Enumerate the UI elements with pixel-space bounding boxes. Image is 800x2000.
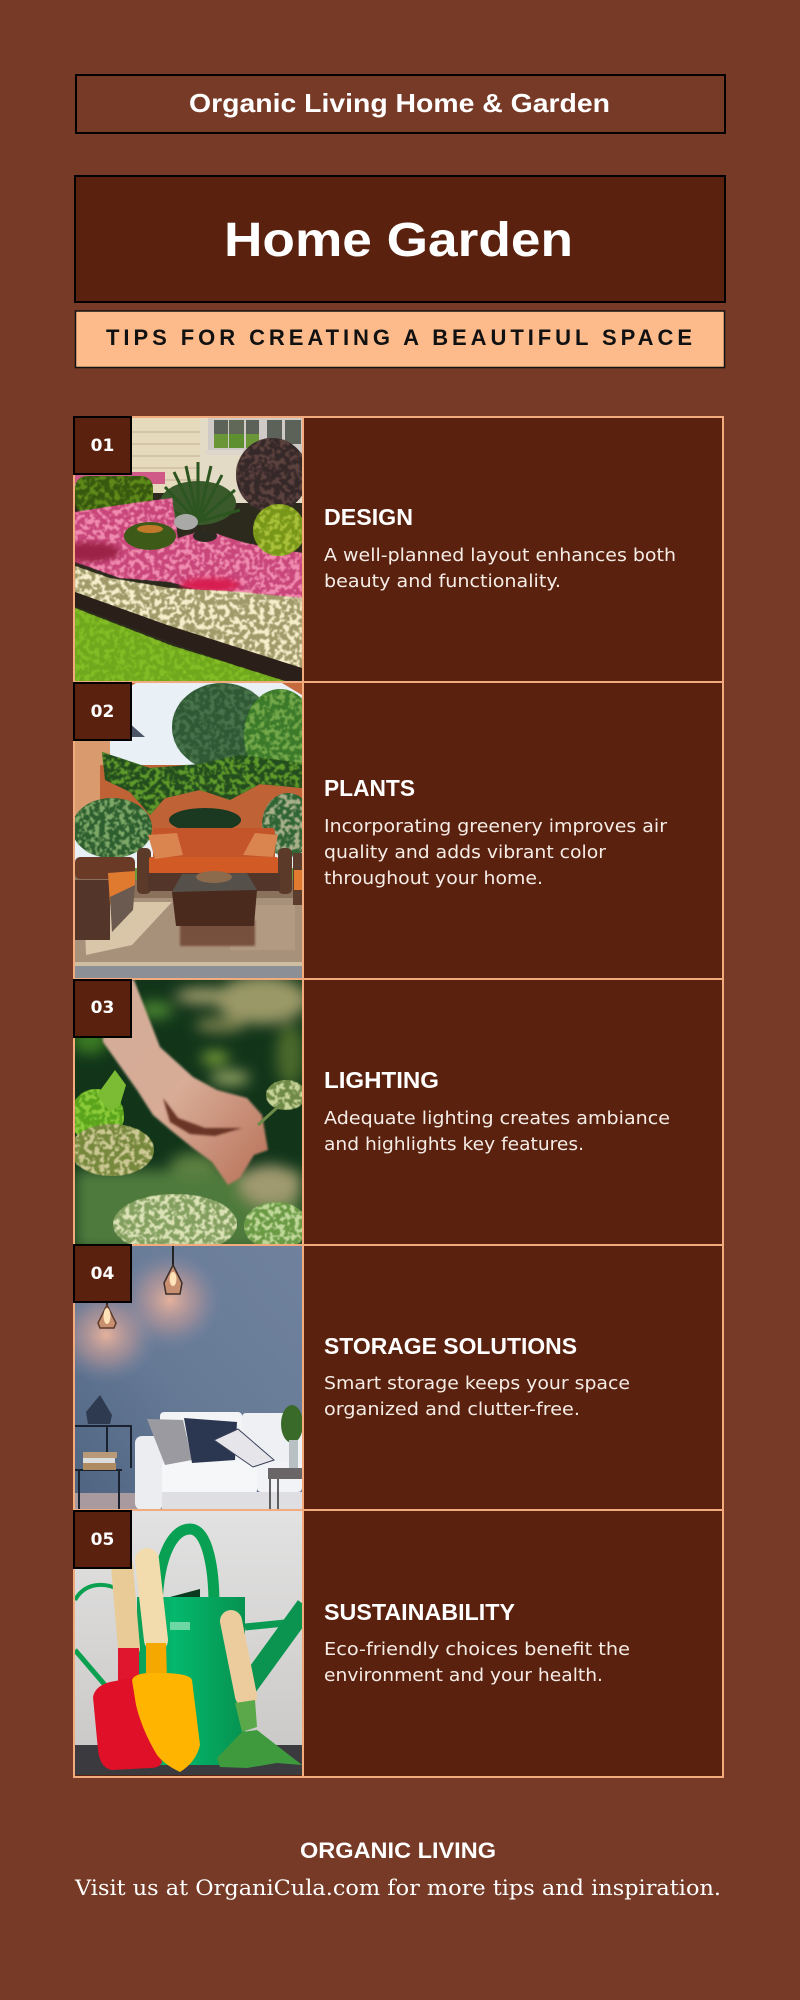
tip text: plants: PLANTS: [324, 775, 415, 801]
number badge 04: [74, 1245, 131, 1302]
number badge 02: 02: [91, 702, 114, 722]
tip text: lighting: Adequate lighting creates ambiance: [324, 1109, 670, 1129]
photo: flower garden bed: [60, 418, 308, 681]
photo: hand picking herbs: [70, 976, 308, 1254]
number badge 05: 05: [91, 1530, 114, 1550]
tip text: design: DESIGN: [324, 504, 413, 530]
tip text: plants: Incorporating greenery improves air: [324, 817, 668, 837]
tip text: lighting: [324, 1067, 670, 1155]
title: Home Garden: [224, 214, 573, 267]
tip text: design: beauty and functionality.: [324, 572, 561, 592]
subtitle banner: [76, 311, 724, 368]
tip text: plants: [324, 775, 668, 889]
brand header: Organic Living Home & Garden: [189, 88, 610, 118]
tip text: storage solutions: organized and clutter-free.: [324, 1400, 580, 1420]
title: [75, 176, 725, 302]
tip text: design: A well-planned layout enhances both: [324, 546, 676, 566]
photo: sofa under pendant lights: [54, 1246, 303, 1510]
tip text: plants: quality and adds vibrant color: [324, 843, 607, 863]
number badge 04: 04: [91, 1264, 114, 1284]
subtitle banner: TIPS FOR CREATING A BEAUTIFUL SPACE: [106, 325, 692, 350]
number badge 03: [74, 980, 131, 1037]
tip text: sustainability: Eco-friendly choices benefit the: [324, 1640, 630, 1660]
number badge 05: [74, 1511, 131, 1568]
tip text: sustainability: environment and your health.: [324, 1666, 603, 1686]
footer: ORGANIC LIVING: [300, 1838, 496, 1863]
tip text: storage solutions: STORAGE SOLUTIONS: [324, 1333, 577, 1359]
tip text: sustainability: [324, 1599, 630, 1686]
tip text: lighting: and highlights key features.: [324, 1135, 584, 1155]
photo: watering can and garden tools: [75, 1511, 306, 1775]
tip text: storage solutions: Smart storage keeps your space: [324, 1374, 630, 1394]
footer: [74, 1838, 721, 1900]
tip text: sustainability: SUSTAINABILITY: [324, 1599, 515, 1625]
tip text: design: [324, 504, 676, 592]
number badge 01: 01: [91, 436, 114, 456]
number badge 01: [74, 417, 131, 474]
brand header: [76, 75, 725, 133]
number badge 03: 03: [91, 998, 114, 1018]
tip text: plants: throughout your home.: [324, 869, 543, 889]
footer: Visit us at OrganiCula.com for more tips and inspiration.: [74, 1876, 721, 1900]
tip text: storage solutions: [324, 1333, 630, 1420]
panel: tips table frame: [74, 417, 723, 1777]
number badge 02: [74, 683, 131, 740]
tip text: lighting: LIGHTING: [324, 1067, 439, 1093]
photo: patio with orange sofa: [72, 683, 316, 978]
